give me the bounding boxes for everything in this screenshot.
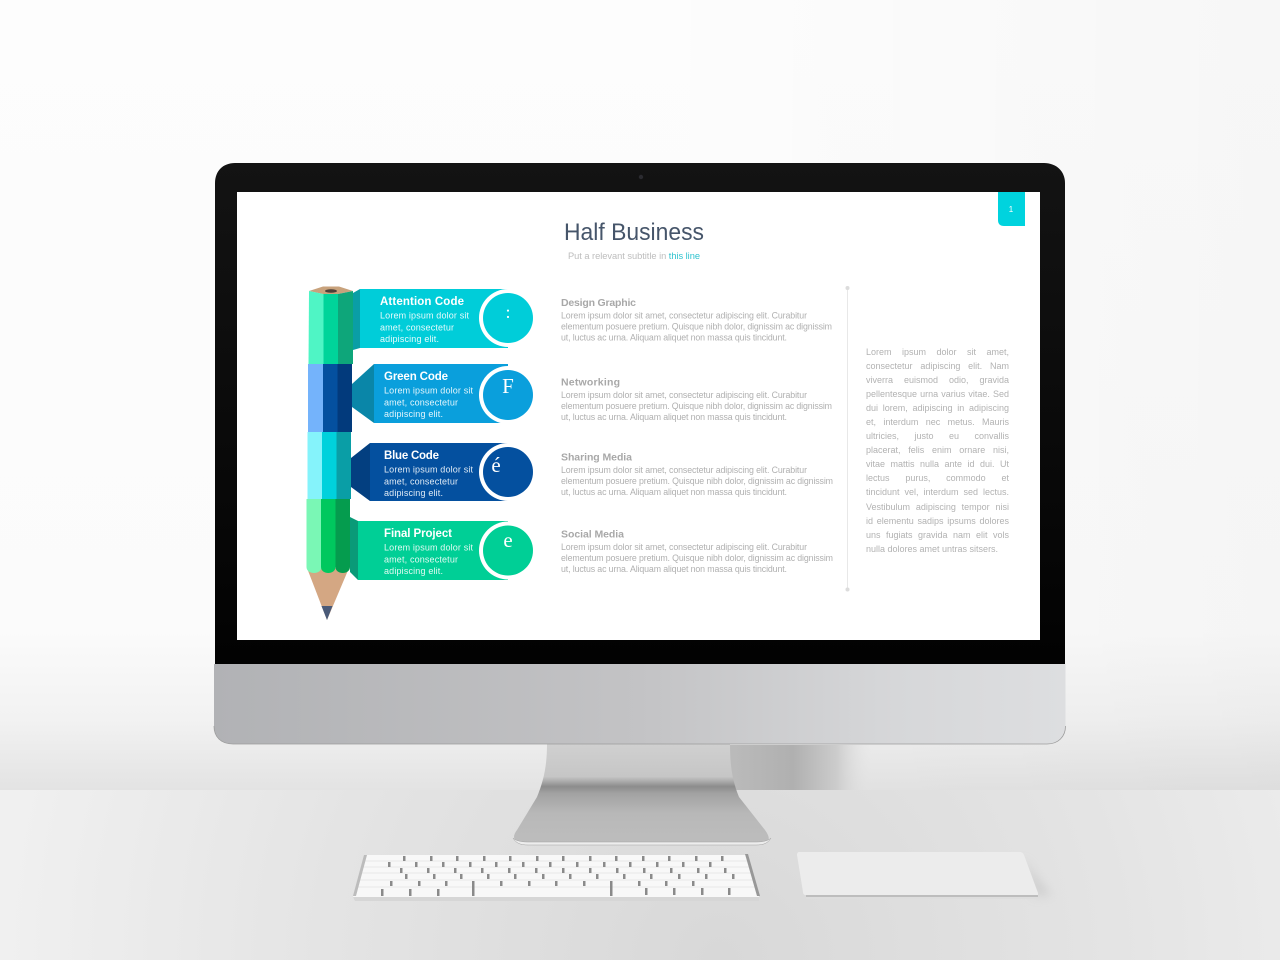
text block: Design Graphic: ut, luctus ac urna. Aliquam aliquet non massa quis tincidunt. (561, 332, 787, 342)
pencil green section (306, 499, 350, 573)
banner: Blue Code (351, 443, 537, 501)
pencil wood tip (307, 568, 349, 620)
banner: Final Project: Lorem ipsum dolor sit (384, 542, 473, 552)
right column paragraph: lectus purus, commodo et (866, 473, 1009, 483)
screen (237, 192, 1040, 640)
pencil lead (322, 606, 332, 620)
text block: Sharing Media: Sharing Media (561, 452, 632, 464)
text block: Networking (561, 376, 832, 422)
monitor chin (214, 664, 1066, 744)
page number tag (998, 192, 1025, 226)
text block: Social Media: elementum posuere pretium. Quisque nibh dolor, dignissim ac dignissim (561, 553, 833, 563)
banner: Final Project (350, 517, 537, 580)
text block: Sharing Media: Lorem ipsum dolor sit amet, consectetur adipiscing elit. Curabitur (561, 465, 807, 475)
keyboard (353, 854, 760, 901)
banner: Attention Code: adipiscing elit. (380, 334, 439, 344)
stand shadow on wall (728, 745, 873, 790)
banner: Green Code: Green Code (384, 371, 448, 383)
camera (639, 175, 643, 179)
text block: Networking: ut, luctus ac urna. Aliquam aliquet non massa quis tincidunt. (561, 412, 787, 422)
right column paragraph: et, interdum nec metus. Mauris (866, 417, 1009, 427)
banner: Green Code: F (502, 374, 514, 398)
right column paragraph: viverra euismod odio, gravida (866, 375, 1009, 385)
text block: Sharing Media: elementum posuere pretium. Quisque nibh dolor, dignissim ac dignissim (561, 476, 833, 486)
desk surface (0, 790, 1280, 960)
banner: Blue Code: é (491, 453, 501, 477)
trackpad (797, 852, 1052, 899)
right column paragraph: nulla dolores amet untras sitsers. (866, 544, 998, 554)
page number tag: 1 (1009, 205, 1014, 214)
subtitle: Put a relevant subtitle in this line (568, 251, 700, 261)
banner: Attention Code: Attention Code (380, 296, 464, 308)
banner: Blue Code: adipiscing elit. (384, 488, 443, 498)
text block: Networking: Lorem ipsum dolor sit amet, consectetur adipiscing elit. Curabitur (561, 390, 807, 400)
right column paragraph: id elementu sadips ipsums dolores (866, 516, 1009, 526)
text block: Social Media (561, 528, 833, 574)
banner: Green Code (352, 364, 537, 424)
banner: Final Project: e (503, 528, 513, 552)
banner: Blue Code: amet, consectetur (384, 476, 458, 486)
text block: Design Graphic: Lorem ipsum dolor sit amet, consectetur adipiscing elit. Curabitur (561, 310, 807, 320)
text block: Sharing Media (561, 452, 833, 497)
monitor stand (513, 744, 771, 845)
right column paragraph: Vestibulum adipiscing tempor nisi (866, 502, 1009, 512)
pencil (306, 286, 353, 620)
right column paragraph: placerat, felis enim ornare nisi, (866, 445, 1009, 455)
text block: Social Media: Lorem ipsum dolor sit amet, consectetur adipiscing elit. Curabitur (561, 542, 807, 552)
right column paragraph: dui lorem, adipiscing in adipiscing (866, 403, 1009, 413)
pencil cap (309, 286, 353, 294)
text block: Networking: elementum posuere pretium. Quisque nibh dolor, dignissim ac dignissim (561, 401, 832, 411)
banner: Attention Code (353, 289, 537, 350)
pencil cyan section (308, 432, 351, 499)
banner: Green Code: amet, consectetur (384, 398, 458, 408)
text block: Design Graphic (561, 297, 832, 342)
pencil mint section (308, 291, 353, 364)
banner: Attention Code: : (505, 302, 511, 322)
banner: Blue Code: Blue Code (384, 450, 439, 462)
banner: Attention Code: amet, consectetur (380, 322, 454, 332)
right column paragraph: pellentesque urna varius vitae. Sed (866, 389, 1009, 399)
right column paragraph: uns fugiats gravida nam elit vols (866, 530, 1009, 540)
pencil blue section (308, 364, 352, 432)
banner: Green Code: Lorem ipsum dolor sit (384, 386, 473, 396)
text block: Social Media: Social Media (561, 528, 624, 540)
monitor (214, 163, 1066, 744)
right column paragraph: consectetur adipiscing elit. Nam (866, 361, 1009, 371)
chin lower edge (214, 726, 1066, 744)
text block: Social Media: ut, luctus ac urna. Aliquam aliquet non massa quis tincidunt. (561, 564, 787, 574)
text block: Networking: Networking (561, 376, 620, 388)
banner: Blue Code: Lorem ipsum dolor sit (384, 464, 473, 474)
banner: Attention Code: Lorem ipsum dolor sit (380, 310, 469, 320)
banner: Final Project: amet, consectetur (384, 554, 458, 564)
right column paragraph: vitae mattis nulla ante id dui. Ut (866, 459, 1009, 469)
vertical divider (846, 286, 850, 592)
banner: Final Project: Final Project (384, 528, 452, 540)
text block: Sharing Media: ut, luctus ac urna. Aliquam aliquet non massa quis tincidunt. (561, 487, 787, 497)
right column paragraph: ultricies, justo eu convallis (866, 431, 1009, 441)
right column paragraph: tincidunt vel, interdum sed lectus. (866, 487, 1009, 497)
text block: Design Graphic: elementum posuere pretium. Quisque nibh dolor, dignissim ac dignissim (561, 322, 832, 332)
text block: Design Graphic: Design Graphic (561, 297, 636, 309)
banner: Green Code: adipiscing elit. (384, 409, 443, 419)
banner: Final Project: adipiscing elit. (384, 566, 443, 576)
right column paragraph: Lorem ipsum dolor sit amet, (866, 346, 1009, 356)
right column paragraph (866, 346, 1009, 554)
title: Half Business (564, 219, 704, 246)
monitor bezel (215, 163, 1065, 664)
